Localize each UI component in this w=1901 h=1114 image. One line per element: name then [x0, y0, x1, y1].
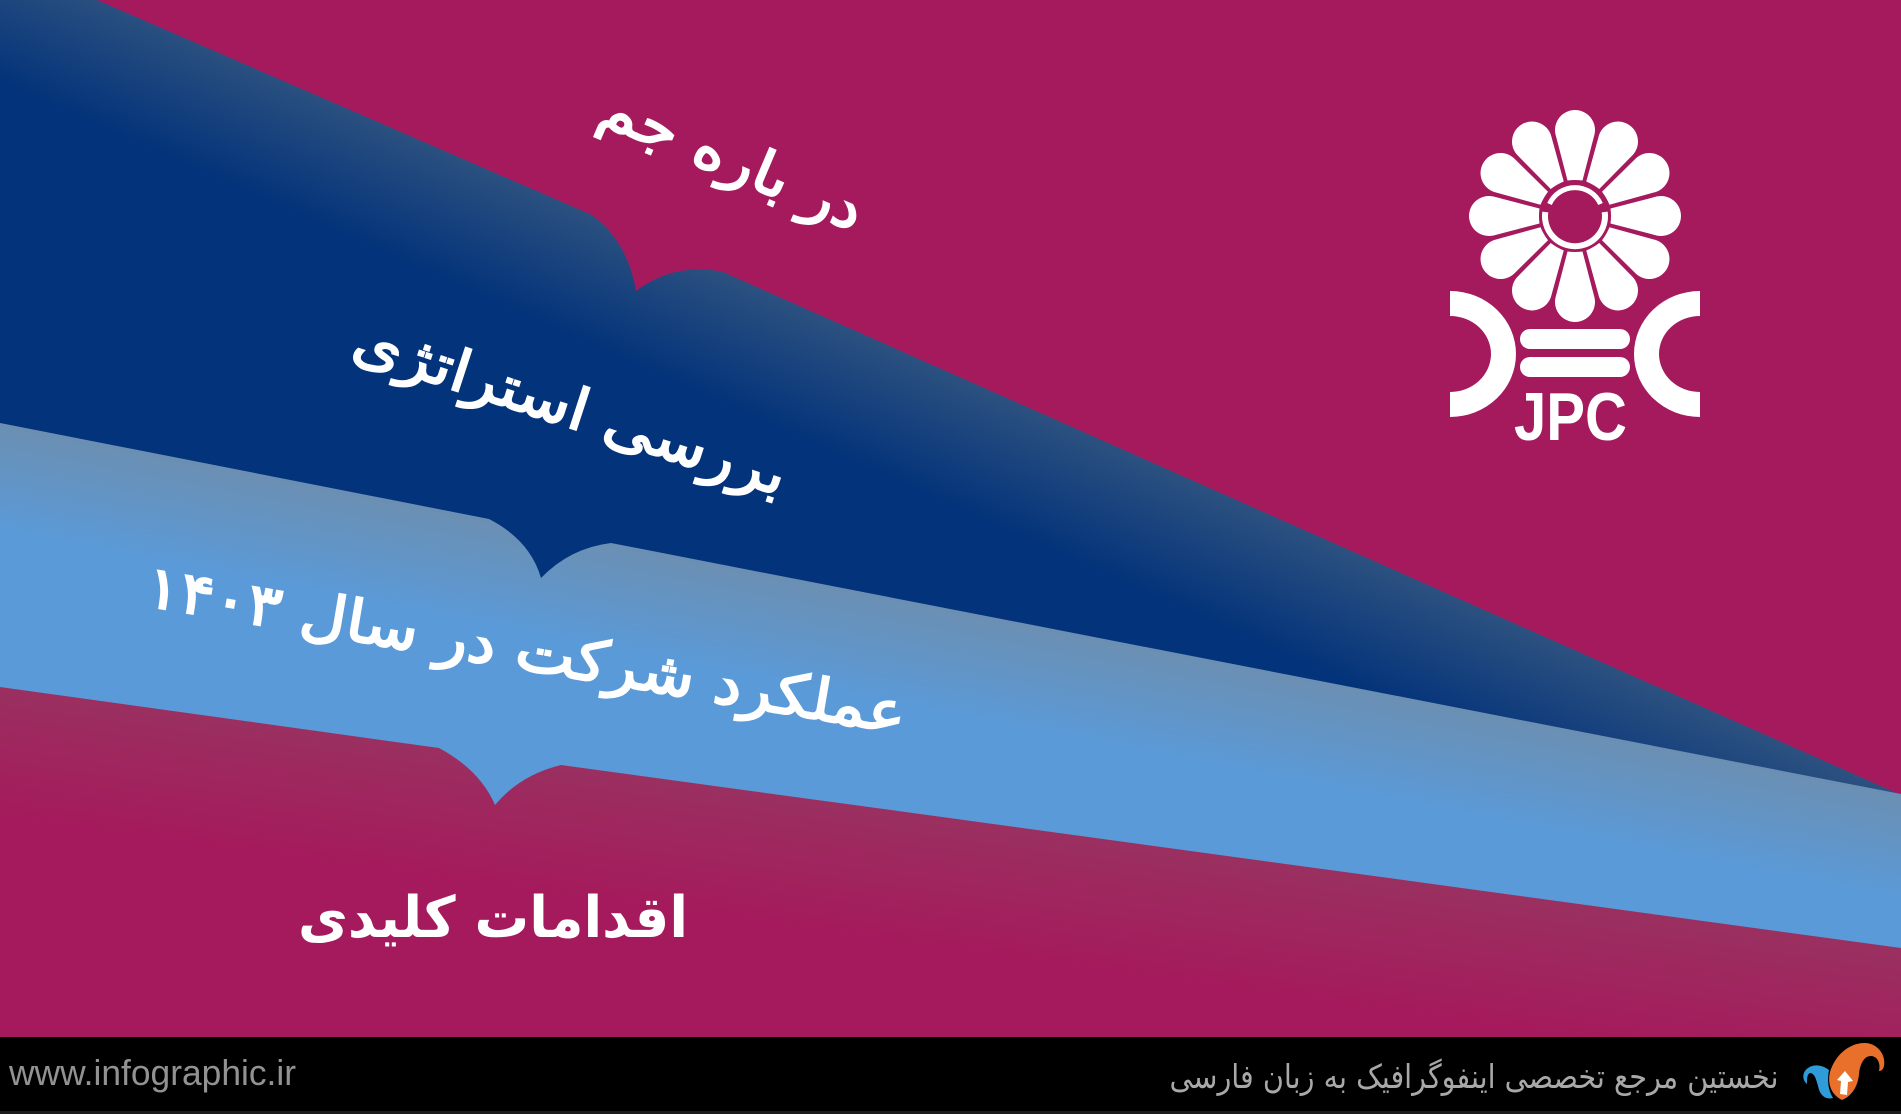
logo flower: [1469, 110, 1681, 322]
footer tagline: نخستین مرجع تخصصی اینفوگرافیک به زبان فارسی: [1170, 1057, 1778, 1096]
heading: company performance 1403: عملکرد شرکت در سال ۱۴۰۳: [141, 552, 912, 749]
band: magenta: [0, 687, 1901, 1037]
logo bars: [1520, 329, 1630, 377]
logo crescent left: [1450, 291, 1516, 417]
footer url: www.infographic.ir: [8, 1052, 296, 1093]
heading: strategy review: بررسی استراتژی: [345, 305, 796, 510]
heading: about JPC: در باره جم: [590, 72, 875, 244]
heading: key actions: اقدامات کلیدی: [298, 885, 688, 951]
footer bar: [0, 1037, 1901, 1114]
icon: infographic mark: [1803, 1043, 1884, 1100]
band: light blue: [0, 423, 1901, 1037]
logo: JPC: [1450, 110, 1700, 455]
logo crescent right: [1634, 291, 1700, 417]
logo wordmark: JPC: [1514, 379, 1627, 455]
